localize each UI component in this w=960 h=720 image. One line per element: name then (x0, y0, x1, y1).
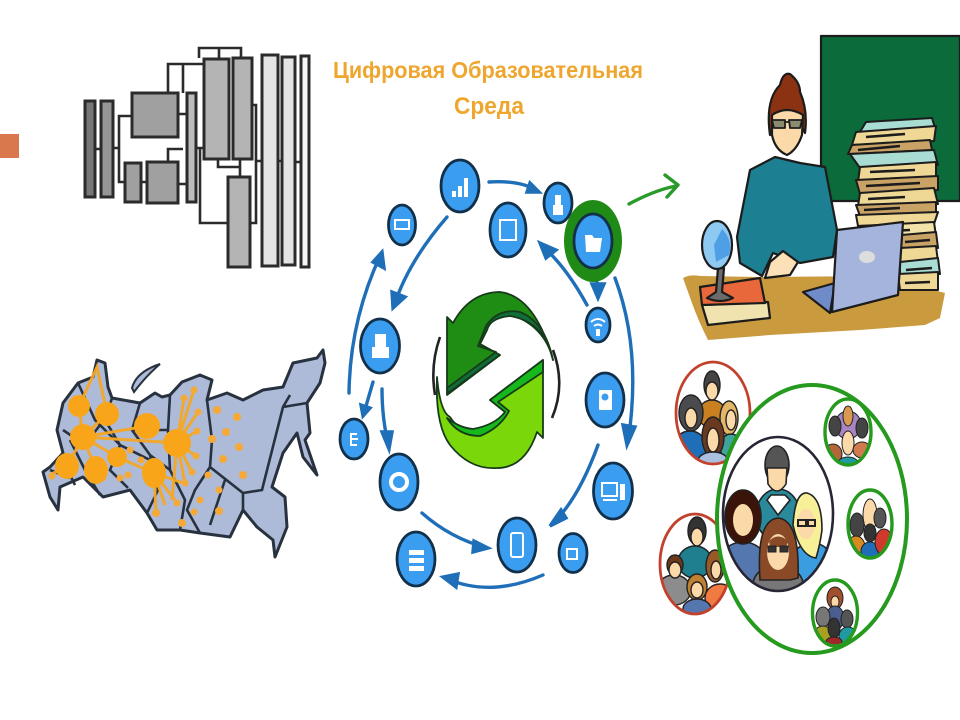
icon: folder (574, 214, 612, 268)
icon: chip (490, 203, 526, 257)
light green arrow (437, 360, 543, 468)
laptop logo (859, 251, 875, 263)
icon: usb adapter (360, 319, 400, 373)
blue cycle arrows (349, 182, 635, 587)
region borders (50, 383, 307, 533)
arrow left outer (349, 252, 384, 393)
arrow to server (443, 574, 543, 587)
network spokes (50, 367, 198, 513)
woman with dark hair (724, 489, 762, 581)
teacher face (772, 110, 803, 155)
woman with blond hair (792, 492, 826, 581)
arc shadows (433, 337, 559, 418)
teacher hair back (769, 74, 806, 135)
icon: usb stick (544, 183, 572, 223)
icon: copy (559, 534, 587, 572)
icon: server (397, 532, 435, 586)
red group circle top (673, 362, 750, 470)
icon: exit (340, 419, 368, 459)
woman with glasses (752, 517, 804, 590)
flow diagram (85, 48, 309, 267)
title: Среда (454, 93, 525, 120)
laptop screen (832, 222, 903, 312)
teacher scene (683, 36, 960, 340)
teacher body (737, 157, 837, 276)
arrow top (489, 182, 539, 192)
icon: signal bars (441, 160, 479, 212)
small team circle bottom (812, 580, 858, 648)
man (758, 445, 797, 534)
green arrow to teacher (629, 175, 678, 204)
icon: gear (380, 454, 418, 510)
arrow to phone from right (550, 445, 598, 526)
icon: phone (498, 518, 536, 572)
globe stand (707, 268, 733, 301)
desk (683, 275, 945, 340)
arrow to exit icon (361, 382, 373, 416)
box 1 (85, 101, 95, 197)
central circular arrows (433, 292, 559, 468)
Novaya Zemlya island (132, 364, 160, 392)
arrow to wifi (592, 282, 604, 298)
large green group circle (657, 362, 907, 653)
arrow to chip (540, 243, 587, 305)
red group circle bottom (658, 512, 728, 616)
arrow right outer (615, 278, 635, 445)
small team circle top (824, 399, 871, 469)
icon: card (388, 205, 416, 245)
small team circle middle (847, 490, 893, 560)
light green arrow inner fold (447, 360, 543, 436)
icon: wifi (586, 308, 610, 342)
map outline (43, 350, 325, 557)
laptop base (803, 283, 835, 313)
dark green arrow (447, 292, 553, 395)
box 2 (101, 101, 113, 197)
paper stack (848, 118, 940, 290)
cycle icons (340, 160, 632, 586)
box 4 (125, 163, 141, 202)
box 11 (282, 57, 295, 265)
stack ink lines (858, 134, 932, 283)
box 10 (262, 55, 278, 266)
orange accent block (0, 134, 19, 158)
box 7 (204, 59, 229, 159)
map of Russia (43, 350, 325, 557)
title: Цифровая Образовательная (333, 57, 643, 83)
chalkboard (821, 36, 960, 201)
icon: desktop computer (594, 463, 632, 519)
box 8 (233, 58, 252, 159)
arrow to phone (422, 513, 488, 552)
folder highlight ring (564, 200, 622, 282)
box 5 (147, 162, 178, 203)
box 9 (228, 177, 250, 267)
box 12 (301, 56, 309, 267)
dots (48, 386, 247, 527)
teacher glasses (772, 120, 802, 128)
books (700, 278, 770, 325)
teacher hands (765, 251, 798, 278)
box 6 (187, 93, 196, 202)
arrow to gear (382, 389, 392, 449)
arrow upper left (392, 217, 447, 308)
icon: hard drive (586, 373, 624, 427)
globe (702, 221, 732, 269)
central team circle (718, 437, 834, 605)
box 3 (132, 93, 178, 137)
hubs (55, 395, 191, 488)
title (333, 57, 643, 120)
dark green arrow inner fold (447, 311, 553, 393)
